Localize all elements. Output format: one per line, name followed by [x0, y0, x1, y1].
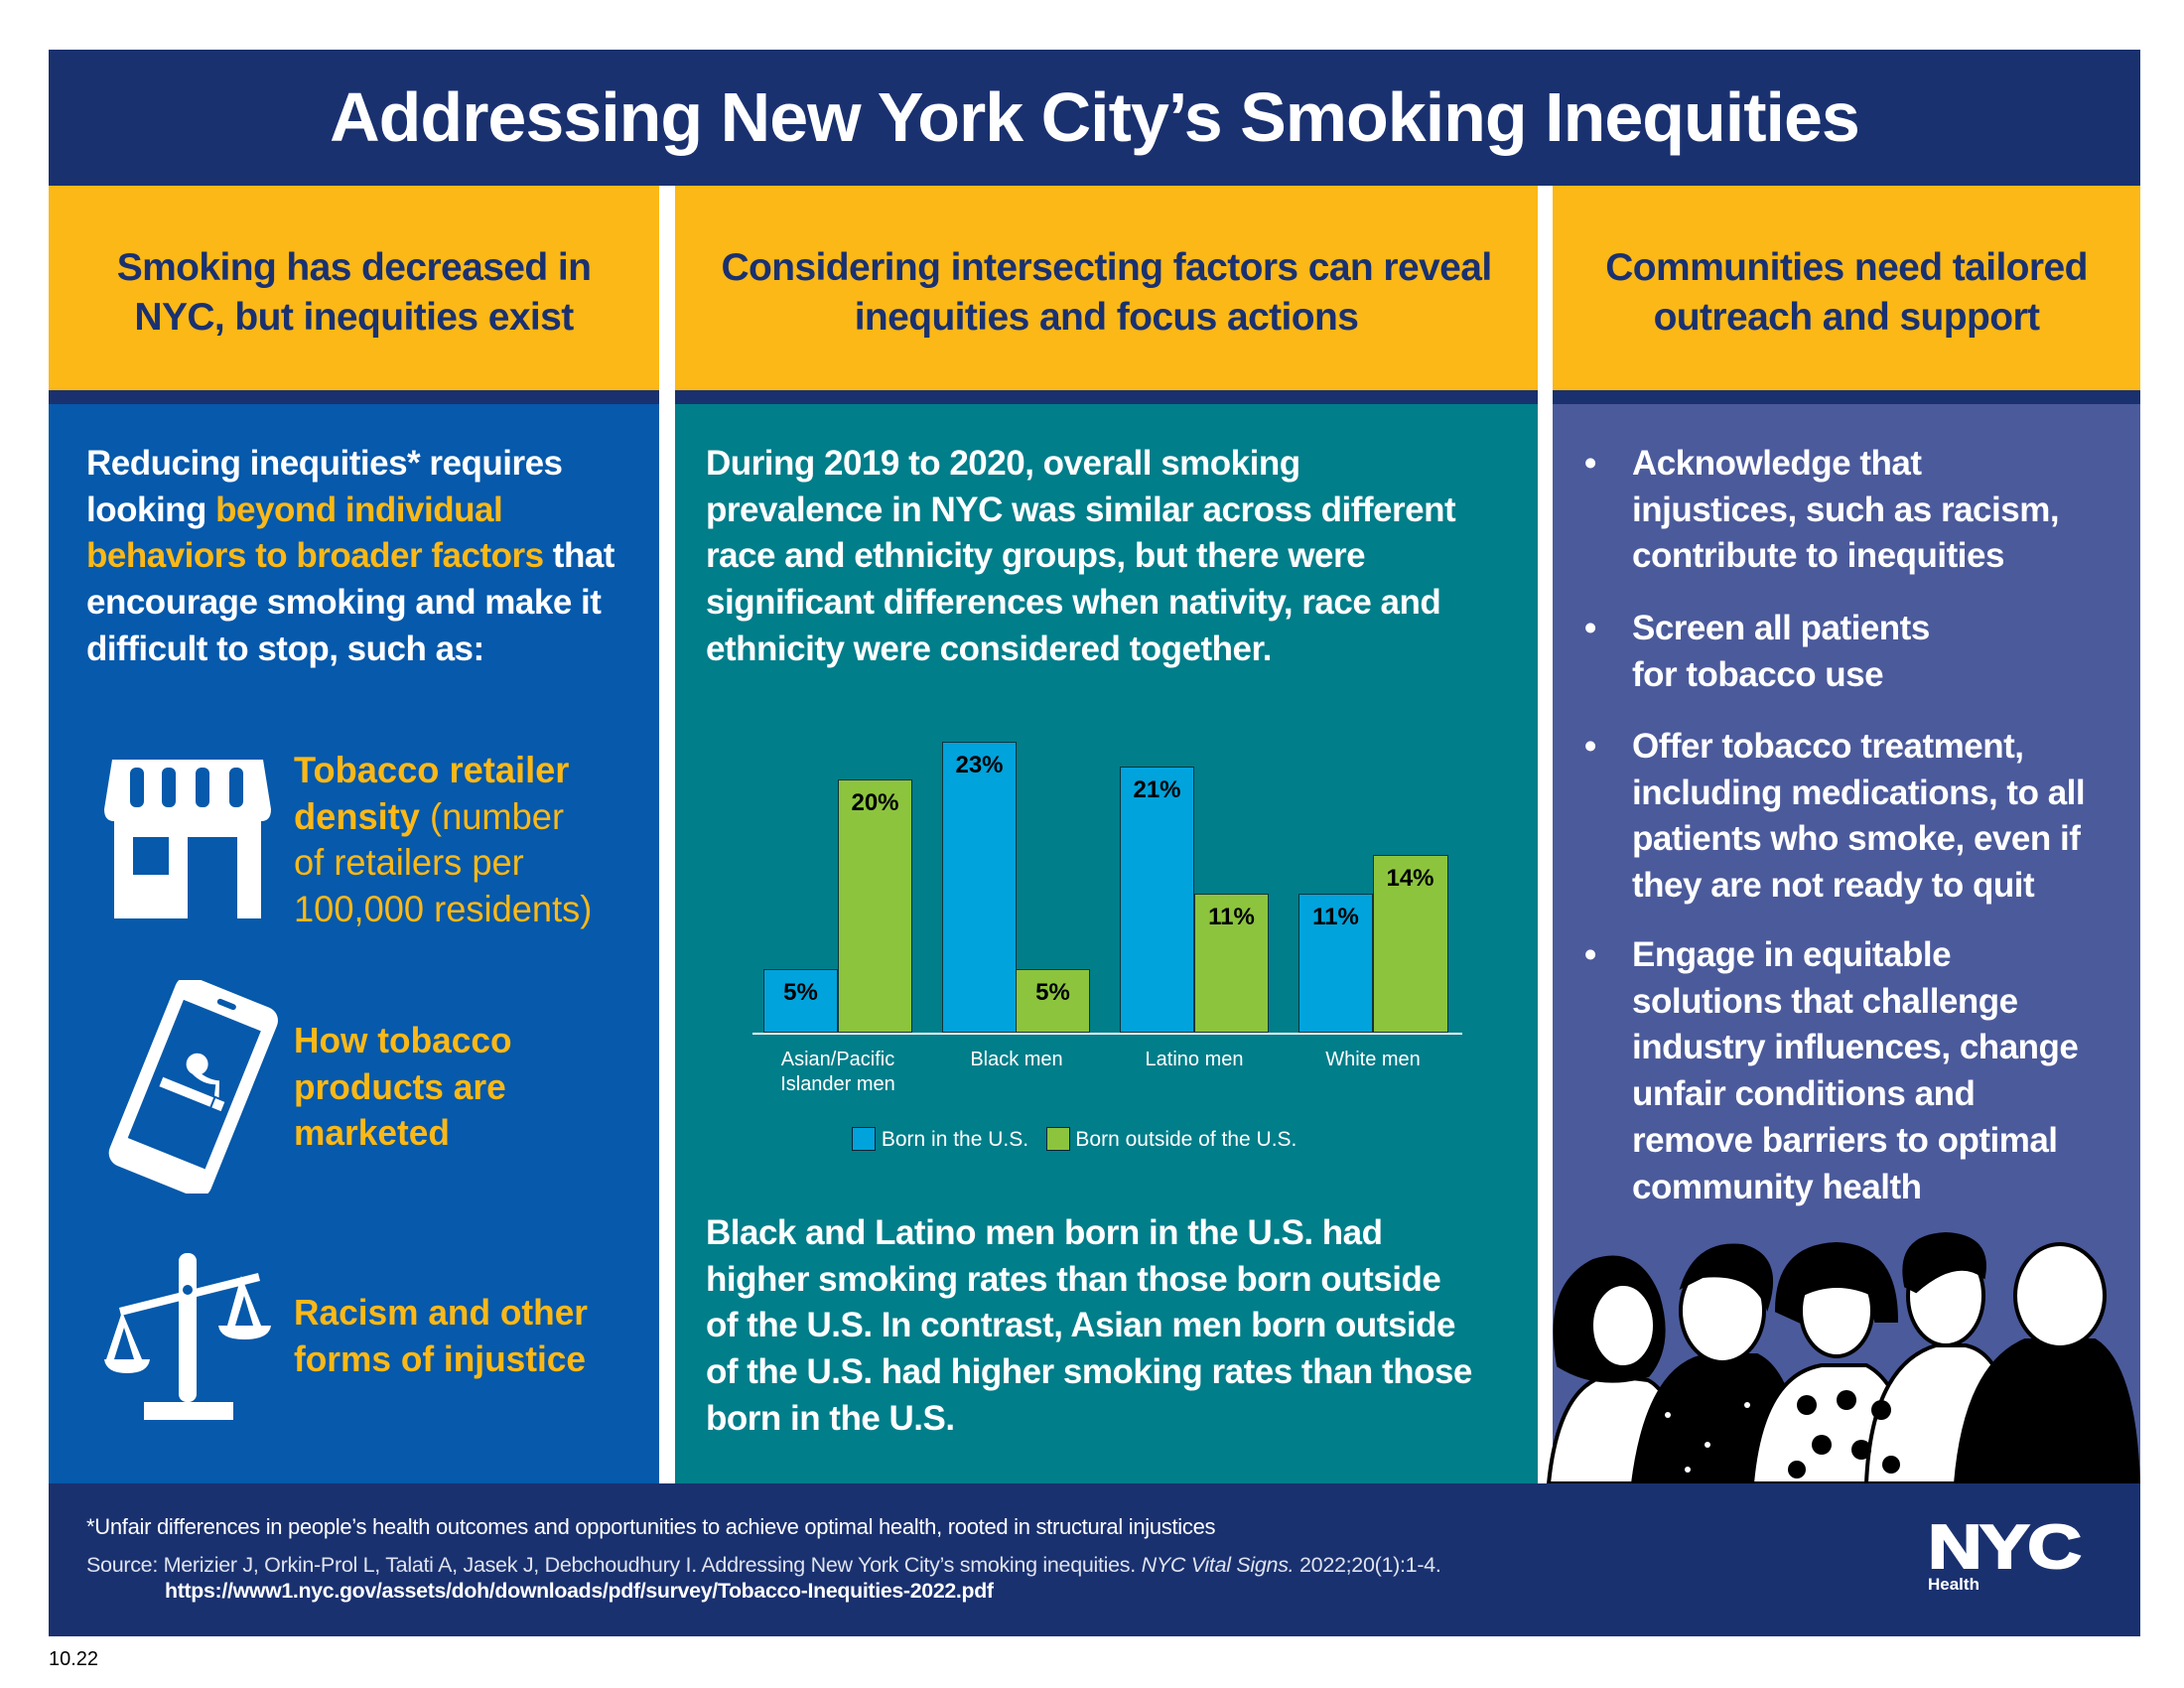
intro text: Reducing inequities* requires — [86, 444, 562, 483]
text: retailer density: 100,000 residents) — [294, 888, 592, 929]
bar chart: Latino men — [1146, 1049, 1243, 1070]
text: injustices, such as racism, — [1632, 491, 2059, 529]
White men bars — [1298, 894, 1373, 1033]
text: retailer density: of retailers per — [294, 842, 524, 883]
bar chart: 11% — [1208, 904, 1255, 930]
text: community health — [1632, 1168, 1921, 1206]
text: retailer density: density (number — [294, 796, 564, 836]
header: column 1: Smoking has decreased in — [117, 246, 591, 289]
text: marketing: products are — [294, 1066, 506, 1106]
panel: broader factors — [49, 404, 659, 1483]
text: solutions that challenge — [1632, 982, 2018, 1021]
text: unfair conditions and — [1632, 1074, 1975, 1113]
text: Acknowledge that — [1632, 444, 1921, 483]
bullet 4 — [1584, 935, 2078, 1206]
bullet 1 — [1584, 444, 2059, 575]
intro text — [86, 444, 614, 668]
bar chart: White men — [1325, 1049, 1421, 1070]
header: column 1 — [49, 186, 659, 390]
bar chart: 11% — [1312, 904, 1359, 930]
title: Addressing New York City’s Smoking Inequities — [330, 78, 1859, 156]
bar chart: 21% — [1133, 776, 1181, 803]
conclusion text — [706, 1213, 1472, 1438]
text: • — [1584, 935, 1596, 974]
bullet 3 — [1584, 727, 2085, 905]
intro text: race and ethnicity groups, but there were — [706, 536, 1365, 575]
header: column 1: NYC, but inequities exist — [134, 296, 574, 339]
illustration: group of people — [1547, 1232, 2140, 1483]
text: they are not ready to quit — [1632, 866, 2034, 905]
intro text: difficult to stop, such as: — [86, 630, 484, 668]
source: Source: Merizier J, Orkin-Prol L, Talati A, Jasek J, Debchoudhury I. Addressing New York City’s smoking inequities. NYC Vital Signs. 2022;20(1):1-4. — [86, 1553, 1441, 1577]
bar chart: 5% — [1035, 979, 1070, 1006]
text: patients who smoke, even if — [1632, 819, 2080, 858]
bar chart: Black men — [970, 1049, 1063, 1070]
category labels — [780, 1049, 895, 1095]
panel: recommendations — [1553, 404, 2140, 1483]
text: racism — [294, 1292, 588, 1378]
footnote: *Unfair differences in people’s health outcomes and opportunities to achieve optimal health, rooted in structural injustices — [86, 1514, 1215, 1539]
conclusion text: of the U.S. In contrast, Asian men born outside — [706, 1306, 1455, 1344]
intro text: significant differences when nativity, race and — [706, 583, 1440, 622]
footer — [49, 1483, 2140, 1636]
source url: https://www1.nyc.gov/assets/doh/downloads/pdf/survey/Tobacco-Inequities-2022.pdf — [165, 1579, 994, 1603]
header: column 2: Considering intersecting factors can reveal — [721, 246, 1492, 289]
conclusion text: Black and Latino men born in the U.S. had — [706, 1213, 1383, 1252]
text: retailer density: Tobacco retailer — [294, 750, 569, 790]
bar chart: 5% — [783, 979, 818, 1006]
text: • — [1584, 444, 1596, 483]
bar chart: 14% — [1386, 865, 1434, 892]
header: column 2: inequities and focus actions — [855, 296, 1358, 339]
text: • — [1584, 609, 1596, 647]
bullet 2 — [1584, 609, 1930, 694]
logo: NYC Health: Health — [1928, 1575, 1979, 1594]
header: column 3 — [1553, 186, 2140, 390]
intro text: ethnicity were considered together. — [706, 630, 1272, 668]
text: • — [1584, 727, 1596, 766]
text: marketing: How tobacco — [294, 1020, 512, 1060]
icon: scales of justice — [104, 1253, 271, 1420]
date code: 10.22 — [49, 1648, 98, 1670]
category labels: Islander men — [780, 1073, 895, 1095]
intro text: During 2019 to 2020, overall smoking — [706, 444, 1300, 483]
header: column 3: outreach and support — [1654, 296, 2039, 339]
icon: store — [104, 760, 271, 918]
intro text: behaviors to broader factors that — [86, 536, 614, 575]
text: Screen all patients — [1632, 609, 1930, 647]
legend: Born in the U.S. Born outside of the U.S. — [882, 1128, 1297, 1151]
conclusion text: of the U.S. had higher smoking rates than those — [706, 1352, 1472, 1391]
text: racism: Racism and other — [294, 1292, 588, 1333]
Asian/Pacific Islander bars — [763, 969, 838, 1033]
intro text — [706, 444, 1455, 668]
bar chart: 20% — [851, 789, 899, 816]
text: for tobacco use — [1632, 655, 1883, 694]
text: industry influences, change — [1632, 1028, 2078, 1066]
panel: intersecting factors — [675, 404, 1538, 1483]
header: column 2 — [675, 186, 1538, 390]
text: retailer density — [294, 750, 592, 929]
intro text: prevalence in NYC was similar across different — [706, 491, 1455, 529]
Latino men bars — [1120, 767, 1194, 1033]
conclusion text: higher smoking rates than those born outside — [706, 1260, 1440, 1299]
logo: NYC Health: NYC — [1928, 1513, 2079, 1582]
intro text: looking beyond individual — [86, 491, 502, 529]
text: racism: forms of injustice — [294, 1338, 586, 1378]
text: marketing — [294, 1020, 512, 1153]
text: including medications, to all — [1632, 774, 2085, 812]
text: contribute to inequities — [1632, 536, 2004, 575]
text: marketing: marketed — [294, 1112, 450, 1153]
category labels: Asian/Pacific — [781, 1049, 894, 1070]
conclusion text: born in the U.S. — [706, 1399, 955, 1438]
Black men bars — [942, 742, 1017, 1033]
bar chart: 23% — [955, 752, 1004, 778]
icon: phone with cigarette — [109, 980, 278, 1194]
bar chart — [752, 742, 1462, 1095]
text: Engage in equitable — [1632, 935, 1951, 974]
header: column 3: Communities need tailored — [1605, 246, 2088, 289]
intro text: encourage smoking and make it — [86, 583, 601, 622]
text: Offer tobacco treatment, — [1632, 727, 2023, 766]
text: remove barriers to optimal — [1632, 1121, 2058, 1160]
